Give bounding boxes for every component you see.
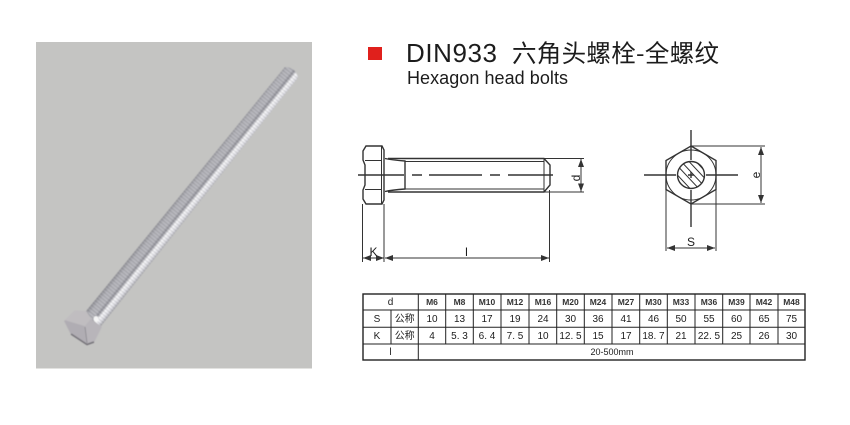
- row: d: M48: [783, 297, 800, 307]
- row: K: 21: [675, 331, 687, 342]
- row: S: [374, 312, 797, 325]
- row: d: M42: [756, 297, 773, 307]
- row: S: 19: [509, 314, 521, 325]
- dimension K: K: [369, 245, 378, 259]
- row: S: 50: [675, 314, 687, 325]
- title: DIN933: [406, 38, 497, 68]
- row: l: 20-500mm: [590, 347, 634, 357]
- row: K: [374, 329, 797, 342]
- icon: red square bullet: [368, 47, 382, 60]
- shank and thread: [385, 158, 550, 192]
- row: S: 46: [648, 314, 659, 325]
- dimension d: d: [569, 175, 583, 181]
- row: S: 36: [592, 314, 604, 325]
- row: S: 24: [537, 314, 549, 325]
- row: d: [388, 297, 800, 308]
- row: S: 65: [758, 314, 770, 325]
- row: K: 26: [758, 331, 770, 342]
- row: l: [389, 347, 634, 358]
- row: d: M12: [507, 297, 524, 307]
- table: dimensions: [363, 294, 805, 360]
- dimension S: S: [687, 235, 695, 249]
- hexagon outline: [666, 146, 716, 204]
- row: K: 30: [786, 331, 797, 342]
- row: S: 13: [454, 314, 465, 325]
- row: d: M27: [618, 297, 635, 307]
- row: K: 10: [537, 331, 549, 342]
- row: d: M10: [479, 297, 496, 307]
- dimension d: [569, 159, 583, 192]
- diagram: bolt side view: [358, 146, 584, 262]
- head outline: [363, 146, 384, 204]
- dimension l: l: [465, 245, 468, 259]
- row: d: M6: [426, 297, 438, 307]
- infographic: DIN933 hexagon head bolt: [36, 41, 806, 368]
- centre line: [358, 174, 553, 176]
- row: K: 公称: [395, 329, 415, 342]
- row: S: 10: [426, 314, 438, 325]
- chamfer circle: [666, 150, 716, 200]
- row: d: M39: [728, 297, 745, 307]
- title: [406, 35, 719, 70]
- extension lines: [362, 158, 584, 262]
- row: K: 6. 4: [479, 331, 496, 342]
- row: S: 60: [731, 314, 742, 325]
- dimension e: e: [749, 171, 763, 178]
- row: K: 12. 5: [559, 331, 582, 342]
- row: S: 17: [481, 314, 493, 325]
- row: K: 18. 7: [642, 331, 665, 342]
- row: K: 17: [620, 331, 632, 342]
- row: S: 公称: [395, 312, 415, 325]
- row: d: M33: [673, 297, 690, 307]
- row: K: 5. 3: [451, 331, 468, 342]
- icon: photo of full-thread bolt: [65, 63, 302, 345]
- row: d: M30: [645, 297, 662, 307]
- hatched shaft section: [676, 160, 706, 190]
- centre cross: [644, 130, 738, 227]
- row: S: 41: [620, 314, 632, 325]
- row: K: 7. 5: [507, 331, 524, 342]
- row: S: 30: [565, 314, 576, 325]
- row: K: 4: [429, 331, 435, 342]
- diagram: hexagon end view: [644, 130, 765, 251]
- row: K: K: [374, 331, 381, 342]
- subtitle: Hexagon head bolts: [407, 68, 568, 88]
- extension lines: [666, 146, 765, 251]
- panel: bolt photograph: [36, 42, 312, 368]
- row: S: 75: [786, 314, 797, 325]
- row: d: d: [388, 297, 393, 308]
- row: l: l: [389, 347, 392, 358]
- row: d: M24: [590, 297, 607, 307]
- dimension K: [363, 245, 384, 259]
- row: S: 55: [703, 314, 715, 325]
- row: K: 22. 5: [698, 331, 721, 342]
- row: K: 15: [592, 331, 604, 342]
- row: d: M20: [562, 297, 579, 307]
- row: d: M8: [454, 297, 466, 307]
- row: S: S: [374, 314, 381, 325]
- row: d: M36: [701, 297, 718, 307]
- title: 六角头螺栓-全螺纹: [512, 35, 719, 70]
- row: d: M16: [535, 297, 552, 307]
- row: K: 25: [731, 331, 742, 342]
